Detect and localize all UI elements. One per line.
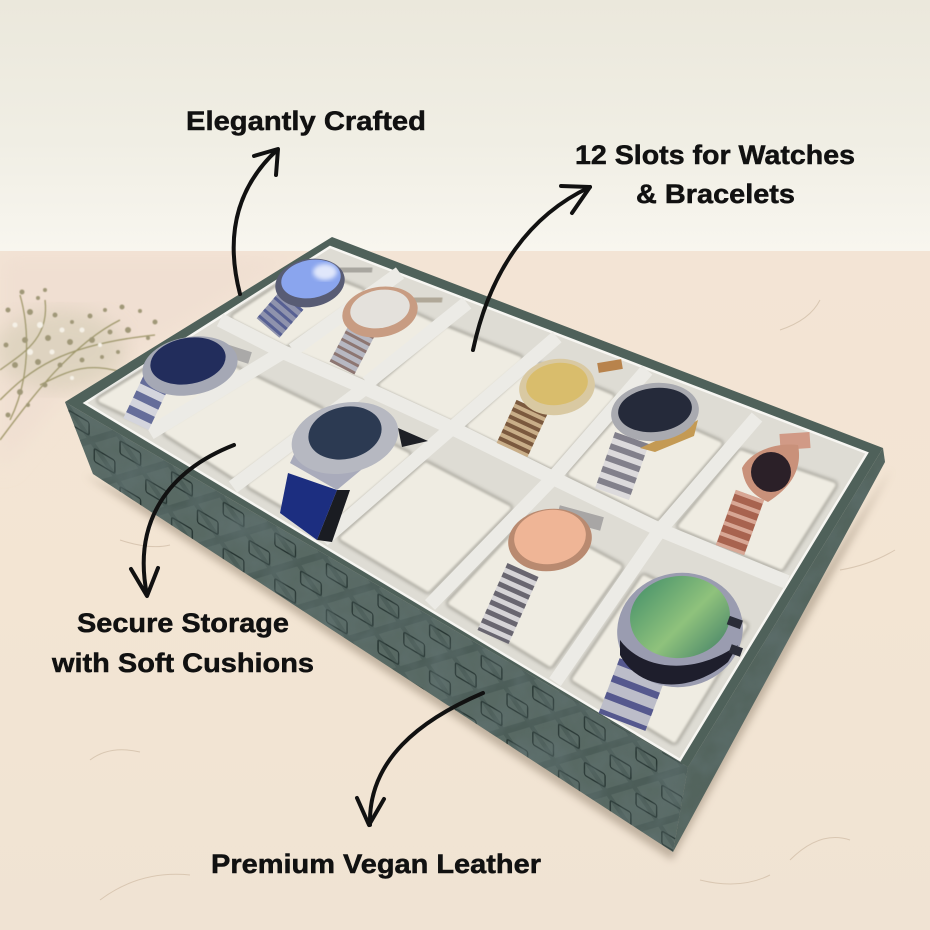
soft cushions [101, 270, 833, 740]
label: elegantly crafted: Elegantly Crafted [186, 106, 426, 136]
watch: navy chronograph [136, 329, 250, 424]
label: secure storage [51, 608, 314, 678]
watch: rose gold bezel [338, 281, 442, 368]
watch: gold crystal [512, 354, 622, 450]
background wall [0, 0, 930, 252]
jewellery tray [65, 237, 885, 852]
label: 12 slots [575, 140, 855, 209]
watch: navy rubber strap [280, 393, 428, 542]
arrow: secure storage [131, 445, 234, 596]
dividers [150, 273, 787, 682]
watch: rose dial [493, 503, 602, 637]
watch: green chronograph [608, 563, 752, 722]
right leather wall [673, 448, 885, 852]
arrow: elegantly crafted [234, 149, 278, 294]
dried flower sprig [0, 288, 158, 440]
cream interior [85, 247, 867, 760]
label: secure storage: with Soft Cushions [51, 648, 314, 678]
background table surface [0, 251, 930, 930]
label: 12 slots: & Bracelets [636, 179, 795, 209]
top leather rim [65, 237, 883, 767]
label: 12 slots: 12 Slots for Watches [575, 140, 855, 170]
watch: rose gold snake [730, 440, 810, 550]
watch: black and gold [608, 379, 702, 494]
watch: blue dial [268, 253, 372, 328]
recessed shadows [101, 270, 833, 740]
front leather wall [65, 402, 688, 852]
label: premium vegan leather: Premium Vegan Leather [211, 849, 542, 879]
label: secure storage: Secure Storage [77, 608, 289, 638]
arrow: premium vegan leather [357, 693, 483, 825]
arrow: 12 slots [473, 186, 590, 350]
tray shadow [85, 468, 892, 860]
